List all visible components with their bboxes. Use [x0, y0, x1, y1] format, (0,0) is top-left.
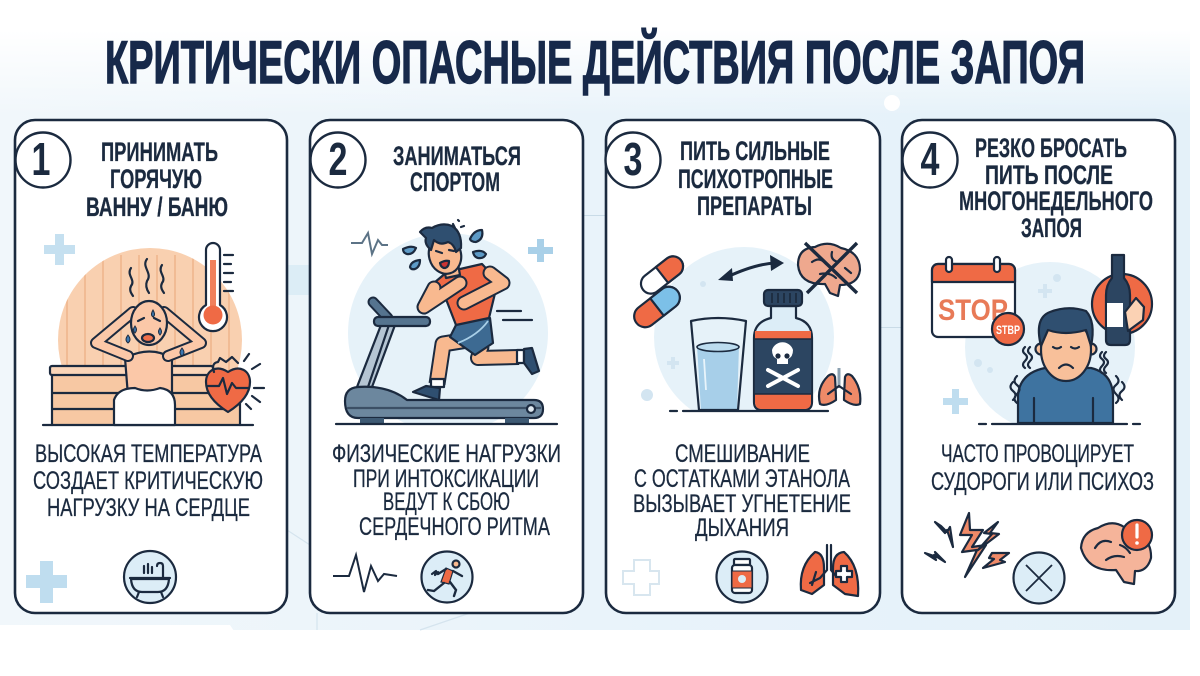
thermometer [199, 243, 233, 331]
crossed brain [798, 243, 860, 296]
panel: card 4 quitting abruptly [902, 120, 1175, 613]
illustration: pills bottle glass [630, 243, 860, 427]
body text 3: ДЫХАНИЯ [695, 514, 789, 542]
heading 4: РЕЗКО БРОСАТЬ [975, 133, 1127, 163]
body text 3 [633, 440, 851, 542]
plus [528, 239, 553, 262]
panel: card 2 sport [310, 120, 583, 613]
icon: medical cross light [44, 234, 75, 265]
person [96, 301, 201, 396]
heading 4: ПИТЬ ПОСЛЕ [985, 160, 1113, 190]
number badge 3 [606, 132, 660, 188]
small lungs [819, 368, 860, 405]
bottle in hand [1092, 255, 1152, 345]
plus [943, 389, 968, 414]
backdrop dots [641, 281, 706, 401]
bottom pill [630, 282, 684, 332]
body text 2: ПРИ ИНТОКСИКАЦИИ [353, 465, 539, 493]
backdrop dots [974, 274, 1061, 373]
heading 1: ПРИНИМАТЬ [101, 137, 218, 167]
illustration: man in withdrawal [932, 255, 1152, 432]
ground line [979, 423, 1140, 425]
top pill [637, 252, 687, 298]
body text 3: С ОСТАТКАМИ ЭТАНОЛА [634, 465, 850, 493]
number badge 1 [16, 132, 70, 188]
glass of water [691, 318, 746, 410]
steam lines [130, 259, 164, 296]
icon: lungs with plus [801, 545, 858, 596]
body text 1 [33, 440, 263, 522]
treadmill [336, 302, 557, 424]
stop badge: STBP [996, 323, 1020, 337]
icon: large cross [26, 561, 67, 603]
towel [114, 388, 175, 425]
icon: outline cross [623, 560, 659, 595]
backdrop circle [348, 233, 548, 433]
double arrow [718, 255, 784, 281]
number badge 2: 2 [329, 133, 347, 185]
calendar stop [932, 257, 1015, 337]
body text 2: СЕРДЕЧНОГО РИТМА [359, 513, 550, 541]
icon: pill bottle [716, 552, 768, 602]
backdrop circle [965, 262, 1135, 432]
heading 1: ВАННУ / БАНЮ [86, 192, 228, 222]
body text 3: ВЫЗЫВАЕТ УГНЕТЕНИЕ [633, 490, 851, 518]
heading 1 [86, 137, 228, 222]
icon: brain with alert [1081, 520, 1152, 584]
body text 4 [931, 440, 1154, 496]
heading 4 [959, 133, 1153, 243]
runner [413, 224, 539, 400]
calendar stop: STOP [938, 294, 1008, 327]
sauna backdrop [55, 245, 245, 375]
heading 3 [678, 136, 833, 221]
icon: lightning bolts [925, 513, 1009, 577]
number badge 2 [310, 132, 366, 188]
poison bottle [754, 290, 812, 410]
body text 2 [332, 440, 561, 541]
heading 2: СПОРТОМ [410, 167, 500, 197]
body text 2: ФИЗИЧЕСКИЕ НАГРУЗКИ [332, 440, 561, 468]
icon: running man [422, 552, 472, 602]
body text 1: НАГРУЗКУ НА СЕРДЦЕ [47, 494, 250, 522]
illustration: man on treadmill [336, 220, 557, 433]
ground line [670, 410, 828, 412]
heading 3: ПРЕПАРАТЫ [697, 191, 812, 221]
person [1018, 308, 1113, 423]
panel: card 1 hot bath [15, 120, 287, 613]
heading 3: ПИТЬ СИЛЬНЫЕ [680, 136, 830, 166]
number badge 4 [902, 132, 958, 188]
backdrop circle [654, 247, 834, 427]
icon: heart with pulse [206, 354, 264, 412]
panel: card 3 psychotropics [606, 120, 880, 613]
icon: bathtub [124, 551, 176, 603]
body text 1: ВЫСОКАЯ ТЕМПЕРАТУРА [35, 440, 262, 468]
sauna bench [43, 366, 253, 425]
icon: crossed circle [1014, 552, 1064, 604]
illustration: man in sauna [43, 243, 264, 425]
heading 4: ЗАПОЯ [1021, 213, 1082, 243]
number badge 3: 3 [624, 133, 642, 185]
heading 1: ГОРЯЧУЮ [110, 164, 202, 194]
body text 3: СМЕШИВАНИЕ [675, 440, 810, 468]
icon: pulse line [333, 555, 397, 592]
number badge 1: 1 [32, 133, 50, 185]
pulse line grey [351, 233, 388, 254]
body text 2: ВЕДУТ К СБОЮ [383, 488, 510, 516]
number badge 4: 4 [921, 133, 940, 185]
sweat drops [403, 230, 486, 269]
shake lines [1010, 347, 1124, 403]
body text 1: СОЗДАЕТ КРИТИЧЕСКУЮ [33, 467, 263, 495]
stop badge [992, 313, 1024, 345]
heading 2: ЗАНИМАТЬСЯ [393, 141, 521, 171]
heading 3: ПСИХОТРОПНЫЕ [678, 164, 833, 194]
heading 2 [393, 141, 521, 197]
